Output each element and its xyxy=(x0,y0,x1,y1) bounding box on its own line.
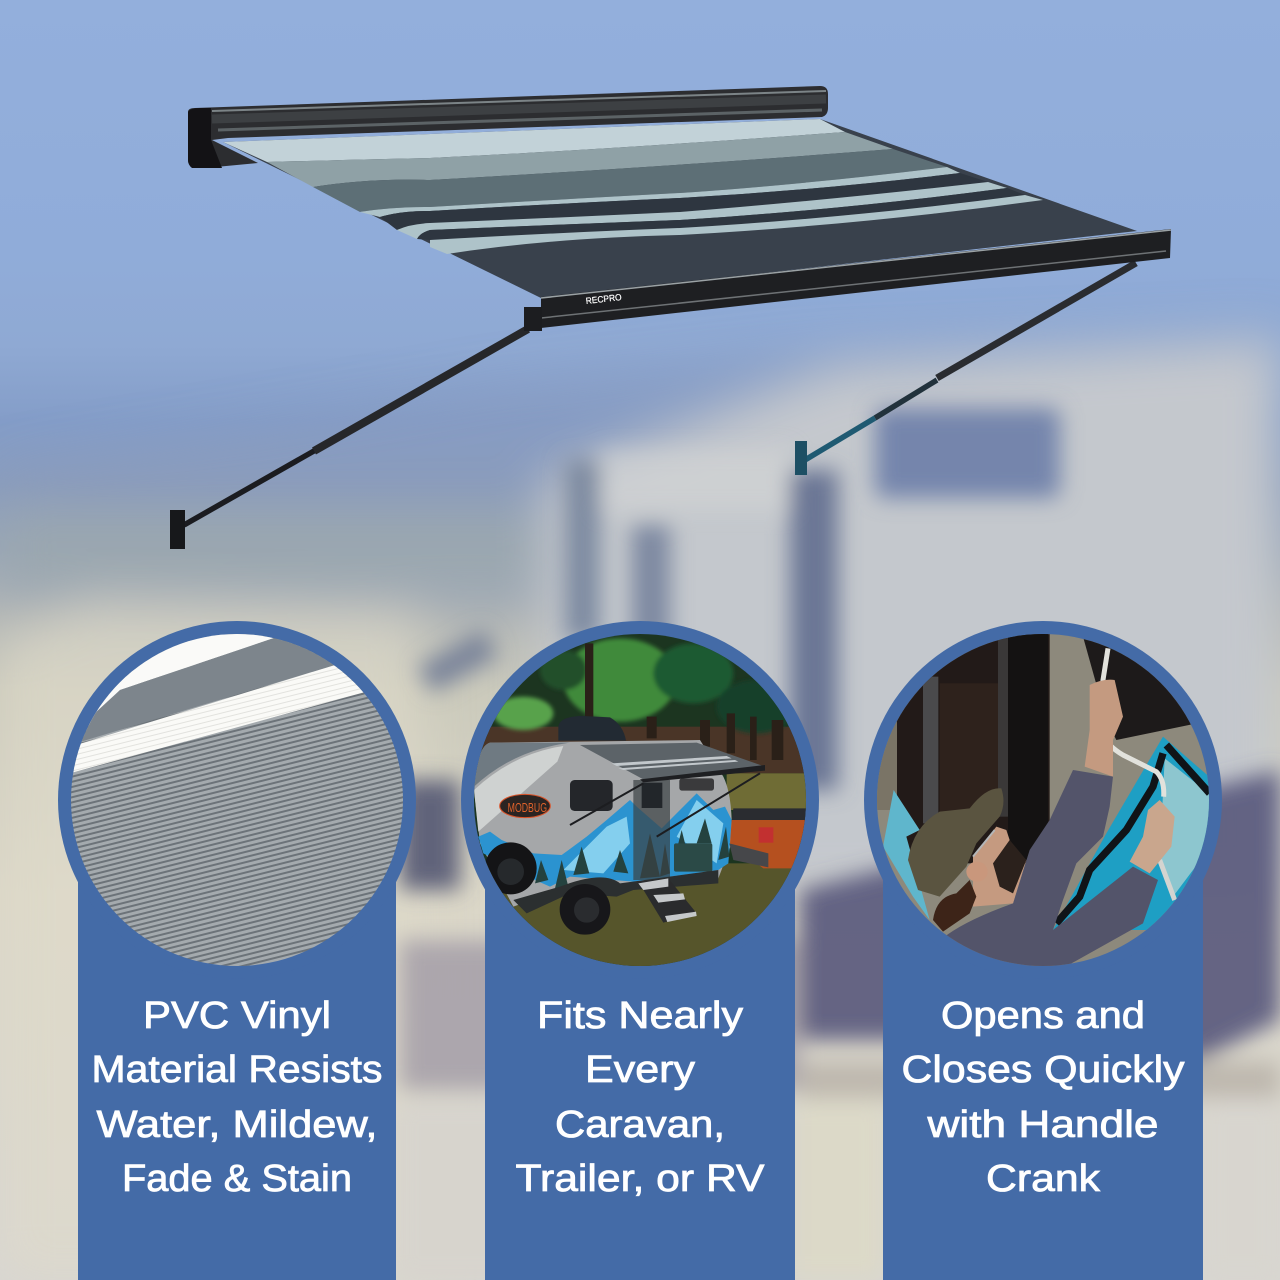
text: crank caption: Opens and xyxy=(941,995,1145,1037)
hoodie xyxy=(945,770,1158,970)
text: PVC vinyl caption xyxy=(92,995,382,1200)
text: fits caption: Caravan, xyxy=(555,1104,725,1146)
awning roller housing xyxy=(188,86,828,168)
trailer frame xyxy=(513,870,718,913)
text: PVC vinyl caption: Water, Mildew, xyxy=(96,1104,378,1146)
text: fits caption xyxy=(516,995,765,1200)
mountain mural xyxy=(478,793,732,887)
photo: trailer with awning xyxy=(470,630,810,970)
pickup truck xyxy=(732,808,810,822)
text: PVC vinyl caption: PVC Vinyl xyxy=(143,995,331,1037)
head xyxy=(973,827,1026,907)
awning product xyxy=(170,86,1171,549)
mountain mural xyxy=(1053,737,1213,930)
ModBug badge xyxy=(500,794,550,818)
brand label: RECPRO xyxy=(585,292,622,306)
awning arm: right xyxy=(795,263,1136,475)
text: fits caption: Fits Nearly xyxy=(537,995,743,1037)
text: fits caption: Every xyxy=(585,1049,695,1091)
text: fits caption: Trailer, or RV xyxy=(516,1158,765,1200)
panel: PVC vinyl material xyxy=(58,620,420,1280)
rooftop AC unit xyxy=(558,716,626,741)
awning front bar xyxy=(524,229,1171,331)
panel: opens and closes with crank xyxy=(864,621,1222,1280)
ModBug badge: MODBUG xyxy=(508,800,547,815)
trailer body xyxy=(474,740,732,907)
cap xyxy=(908,788,1003,897)
entry steps xyxy=(644,886,696,922)
text: crank caption: with Handle xyxy=(926,1104,1158,1146)
dark door and window xyxy=(896,630,1050,863)
text: crank caption xyxy=(902,995,1184,1200)
text: PVC vinyl caption: Material Resists xyxy=(92,1049,382,1091)
awning fabric with stripes xyxy=(223,119,1137,298)
wheels xyxy=(485,842,537,894)
panel: fits nearly every RV xyxy=(461,621,819,1280)
awning arm: left xyxy=(170,329,528,549)
crank handle xyxy=(1100,648,1164,797)
small awning xyxy=(580,743,765,779)
text: PVC vinyl caption: Fade & Stain xyxy=(122,1158,352,1200)
text: crank caption: Crank xyxy=(986,1158,1101,1200)
photo: man using crank handle xyxy=(873,630,1213,970)
windows xyxy=(570,780,613,811)
arms and hands xyxy=(1085,680,1123,777)
photo: fabric close-up xyxy=(71,634,403,966)
text: crank caption: Closes Quickly xyxy=(902,1049,1184,1091)
